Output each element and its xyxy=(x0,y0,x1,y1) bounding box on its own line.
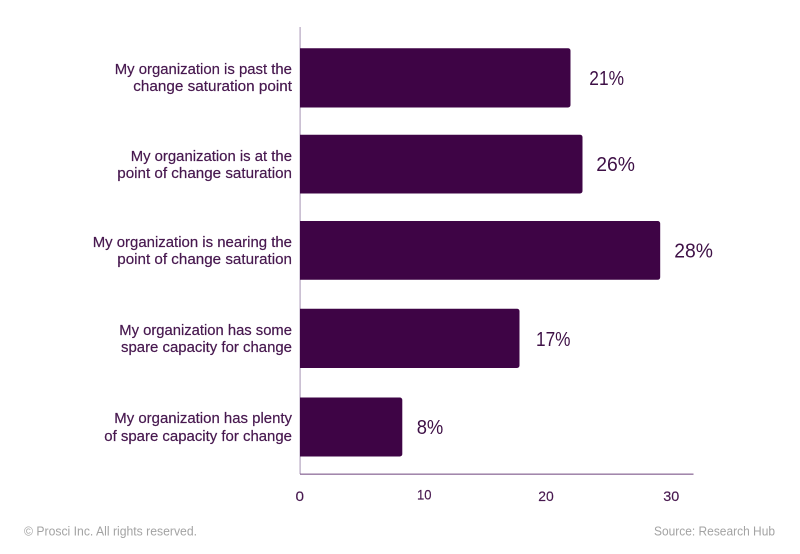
value: 21% xyxy=(589,67,624,90)
label: spare capacity for change xyxy=(121,339,292,356)
horizontal axis xyxy=(300,474,694,475)
axis tick labels: 30 xyxy=(663,488,680,504)
value: 28% xyxy=(674,239,713,262)
footer: source: Source: Research Hub xyxy=(654,524,775,538)
bar xyxy=(300,221,660,280)
label: My organization is at the xyxy=(131,148,292,165)
row: plenty of spare capacity xyxy=(104,398,443,456)
axis tick labels xyxy=(296,486,680,504)
label: My organization has some xyxy=(119,322,292,339)
label: point of change saturation xyxy=(117,165,292,182)
bar xyxy=(300,48,570,108)
label: My organization is nearing the xyxy=(93,234,292,251)
label: My organization has plenty xyxy=(114,410,292,427)
axis tick labels: 20 xyxy=(538,488,554,504)
value: 17% xyxy=(536,328,570,351)
row: past the saturation point xyxy=(115,48,624,108)
axis tick labels: 10 xyxy=(417,486,432,502)
label: of spare capacity for change xyxy=(104,428,292,445)
row: some spare capacity xyxy=(119,309,571,368)
label: point of change saturation xyxy=(117,251,292,268)
row: at the saturation point xyxy=(117,135,635,194)
vertical axis xyxy=(300,27,301,474)
label: My organization is past the xyxy=(115,61,292,78)
axis tick labels: 0 xyxy=(296,488,304,504)
label: change saturation point xyxy=(133,78,293,95)
value: 8% xyxy=(417,416,443,439)
footer: copyright: © Prosci Inc. All rights reserved. xyxy=(24,524,197,538)
bar xyxy=(300,135,582,194)
row: nearing the saturation point xyxy=(93,221,713,280)
bar xyxy=(300,398,402,456)
bar xyxy=(300,309,520,368)
value: 26% xyxy=(596,153,635,176)
